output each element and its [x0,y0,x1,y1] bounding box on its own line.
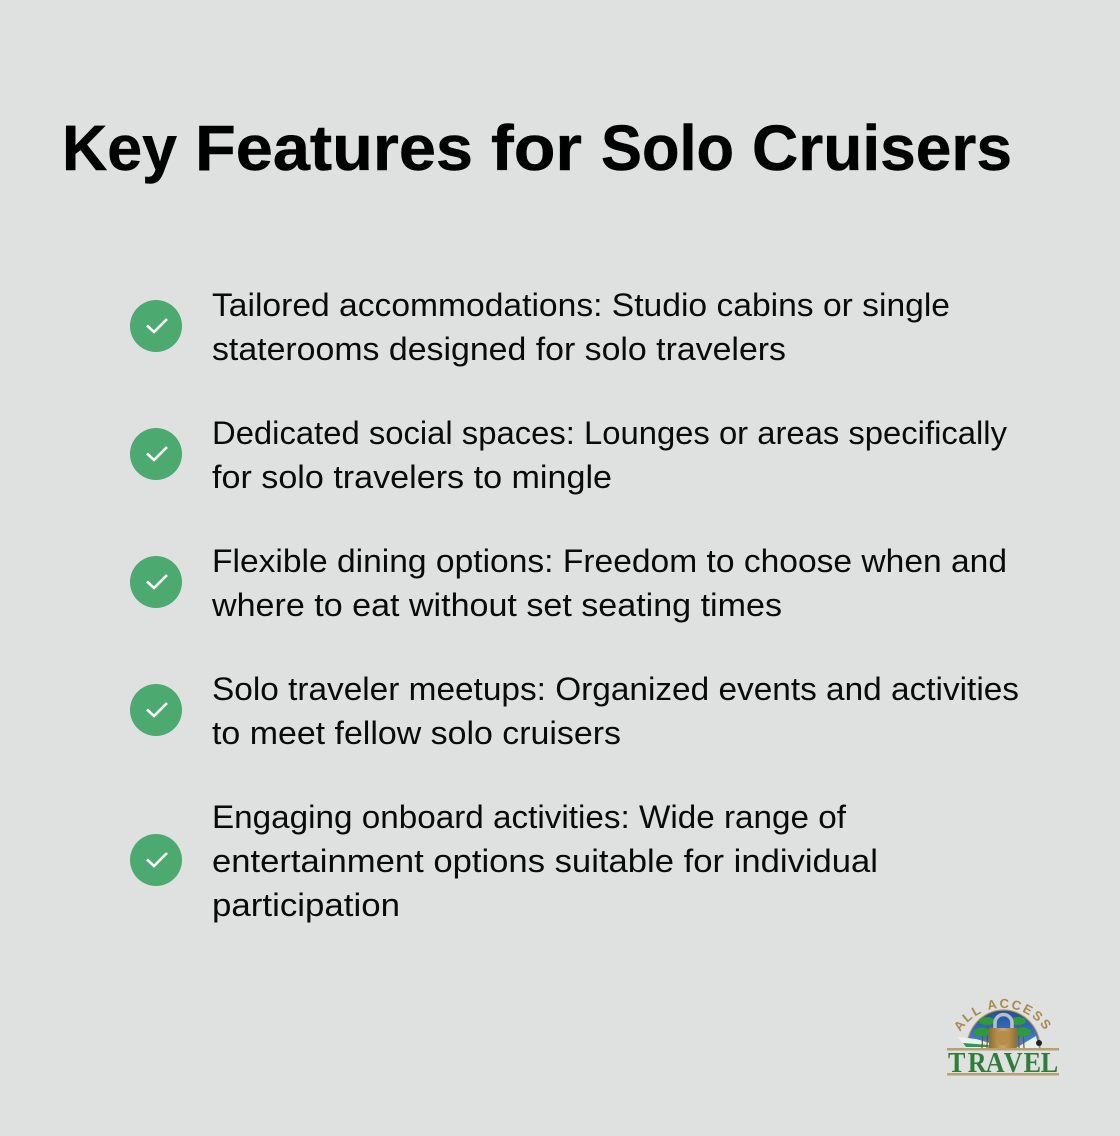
icon: green check [130,300,182,352]
item: tailored accommodations [130,287,950,367]
text: solo traveler meetups: Solo traveler meetups: Organized events and activities [212,671,1019,707]
logo wordmark: TRAVEL [948,1046,1058,1078]
text: dedicated social spaces: for solo travelers to mingle [212,459,612,495]
logo dome [958,1010,1042,1048]
text: flexible dining options: Flexible dining options: Freedom to choose when and [212,543,1007,579]
text: flexible dining options: where to eat without set seating times [211,587,782,623]
text: engaging onboard activities: entertainment options suitable for individual [212,843,878,879]
item: engaging onboard activities [130,799,878,923]
logo palm trees [974,1017,1031,1048]
item: solo traveler meetups [130,671,1019,751]
title: Features [195,112,473,184]
icon: green check [130,556,182,608]
logo arc text: ALL ACCESS [955,998,1050,1032]
text: engaging onboard activities [212,799,878,923]
text: engaging onboard activities: Engaging onboard activities: Wide range of [212,799,847,835]
icon: green check [130,428,182,480]
text: engaging onboard activities: participation [212,887,400,923]
item: dedicated social spaces [130,415,1008,495]
title [62,112,1012,184]
text: solo traveler meetups [212,671,1019,751]
item: flexible dining options [130,543,1007,623]
text: dedicated social spaces [212,415,1008,495]
title: Solo [601,112,734,184]
text: solo traveler meetups: to meet fellow solo cruisers [212,715,621,751]
title: Cruisers [752,112,1012,184]
logo padlock [989,1014,1017,1048]
feature list [130,287,1019,923]
text: dedicated social spaces: Dedicated social spaces: Lounges or areas specifically [212,415,1008,451]
text: tailored accommodations: staterooms designed for solo travelers [212,331,786,367]
text: tailored accommodations: Tailored accommodations: Studio cabins or single [212,287,950,323]
text: flexible dining options [211,543,1007,623]
title: for [491,112,582,184]
title: Key [62,112,177,184]
logo: All Access Travel [947,998,1059,1078]
text: tailored accommodations [212,287,950,367]
logo bars [947,1048,1059,1076]
icon: green check [130,834,182,886]
icon: green check [130,684,182,736]
